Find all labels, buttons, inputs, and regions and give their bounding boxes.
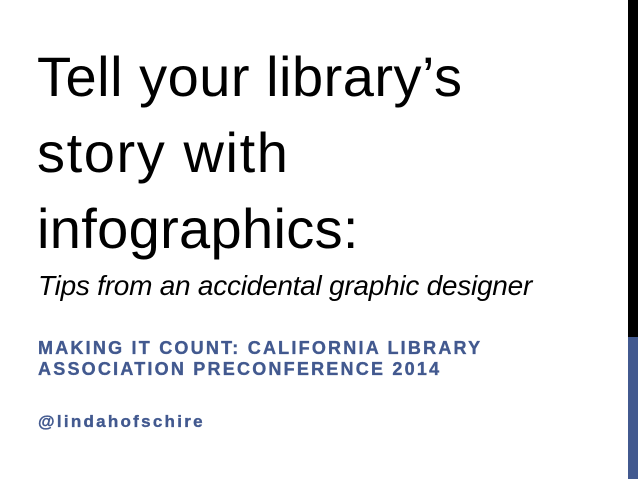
conference text: ASSOCIATION PRECONFERENCE 2014 bbox=[38, 359, 441, 379]
title: story with bbox=[37, 121, 290, 184]
conference text bbox=[38, 338, 482, 379]
title: infographics: bbox=[37, 197, 359, 260]
side bar: blue bbox=[628, 337, 638, 479]
side bar: black bbox=[628, 0, 638, 337]
title bbox=[37, 45, 462, 260]
twitter handle: @lindahofschire bbox=[38, 412, 205, 431]
subtitle: Tips from an accidental graphic designer bbox=[38, 270, 532, 301]
conference text: MAKING IT COUNT: CALIFORNIA LIBRARY bbox=[38, 338, 482, 358]
title: Tell your library’s bbox=[37, 45, 462, 108]
